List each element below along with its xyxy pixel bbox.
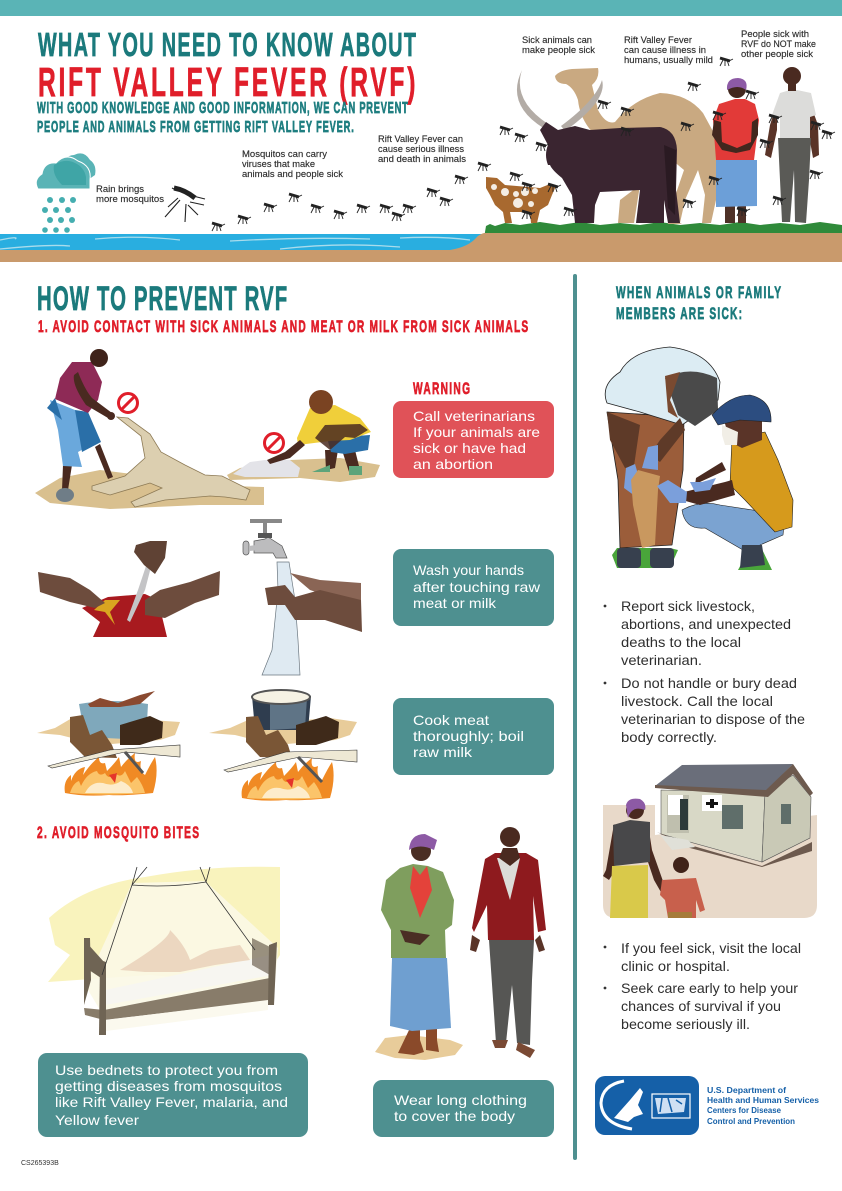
bullet list: seek care: become seriously ill. (621, 1016, 750, 1032)
subtitle (37, 98, 408, 136)
ground (0, 232, 842, 262)
grass (485, 222, 842, 233)
caption: sick animals: Sick animals can (522, 35, 592, 46)
caption: animals illness: cause serious illness (378, 144, 464, 155)
document code: CS265393B (21, 1160, 59, 1167)
water (0, 234, 490, 250)
vertical divider (573, 274, 577, 1160)
callout: cook meat: thoroughly; boil (413, 728, 524, 744)
right column heading (616, 282, 781, 323)
section 2 heading: 2. AVOID MOSQUITO BITES (37, 822, 199, 842)
clinic building (655, 764, 813, 867)
caption: mosquitos (242, 149, 343, 180)
callout: wash hands: meat or milk (413, 595, 497, 611)
bullet list: seek care: Seek care early to help your (621, 980, 798, 996)
title line 2: RIFT VALLEY FEVER (RVF) (38, 60, 415, 106)
callout: long clothing: to cover the body (394, 1108, 515, 1124)
callout: call veterinarians (393, 401, 554, 478)
illustration: visiting clinic (603, 764, 817, 918)
bullet list: report: abortions, and unexpected (621, 616, 791, 632)
agency name: U.S. Department of (707, 1085, 786, 1095)
logo: HHS CDC (595, 1076, 819, 1135)
illustration: washing hands at tap (243, 521, 362, 675)
caption: animals illness: Rift Valley Fever can (378, 134, 463, 145)
caption: human illness: humans, usually mild (624, 55, 713, 66)
illustration: woman in long clothing (375, 834, 463, 1060)
callout: bednets: getting diseases from mosquitos (55, 1078, 282, 1094)
illustration: man dragging dead calf (35, 349, 264, 509)
bullet list: report (604, 598, 805, 745)
callout: call veterinarians: sick or have had (413, 440, 526, 456)
callout: bednets (38, 1053, 308, 1137)
callout: bednets: Use bednets to protect you from (55, 1062, 278, 1078)
illustration: veterinarian examining calf (605, 347, 793, 570)
warning label: WARNING (413, 378, 470, 398)
title (37, 26, 416, 136)
icon: no sign 2 (264, 434, 284, 452)
callout: call veterinarians: an abortion (413, 456, 493, 472)
agency name: Health and Human Services (707, 1095, 819, 1105)
illustration: boy touching raw meat (227, 390, 380, 482)
callout: long clothing (373, 1080, 554, 1137)
icon: goat (486, 177, 556, 223)
subtitle: PEOPLE AND ANIMALS FROM GETTING RIFT VALLEY FEVER. (37, 117, 354, 136)
icon: no sign (118, 394, 138, 412)
illustration: butchering meat (38, 541, 220, 637)
caption: rain (96, 184, 164, 205)
caption: no person to person: People sick with (741, 29, 809, 40)
caption: sick animals: make people sick (522, 45, 595, 56)
caption: animals illness (378, 134, 466, 165)
illustration: man in long clothing (470, 827, 546, 1058)
caption: human illness: Rift Valley Fever (624, 35, 692, 46)
icon: rain cloud (36, 153, 95, 233)
caption: mosquitos: viruses that make (242, 159, 315, 170)
icon: sick woman (712, 78, 759, 223)
bullet list: report: veterinarian to dispose of the (621, 711, 805, 727)
bullet list: report: body correctly. (621, 729, 717, 745)
icon: HHS ring and eagle (601, 1081, 643, 1129)
callout: bednets: Yellow fever (55, 1112, 139, 1128)
panel: transmission scene (0, 29, 842, 262)
icon: large mosquito (165, 188, 205, 222)
illustration: cooking meat (37, 691, 180, 796)
callout: bednets: like Rift Valley Fever, malaria, and (55, 1094, 288, 1110)
caption: no person to person: other people sick (741, 49, 813, 60)
caption: no person to person: RVF do NOT make (741, 39, 816, 50)
section 1 heading: 1. AVOID CONTACT WITH SICK ANIMALS AND MEAT OR MILK FROM SICK ANIMALS (38, 316, 528, 336)
dead calf (92, 417, 250, 507)
caption: human illness (624, 35, 713, 66)
bullet list: seek care: chances of survival if you (621, 998, 781, 1014)
caption: human illness: can cause illness in (624, 45, 706, 56)
bullet list: report: veterinarian. (621, 652, 702, 668)
bullet list: report: livestock. Call the local (621, 693, 773, 709)
callout: wash hands (393, 549, 554, 626)
callout: wash hands: Wash your hands (413, 562, 524, 578)
callout: call veterinarians: Call veterinarians (413, 408, 535, 424)
subtitle: WITH GOOD KNOWLEDGE AND GOOD INFORMATION, WE CAN PREVENT (37, 98, 408, 117)
agency name: Control and Prevention (707, 1116, 795, 1126)
right column heading: MEMBERS ARE SICK: (616, 303, 742, 323)
illustration: bednet (48, 867, 280, 1035)
callout: call veterinarians: If your animals are (413, 424, 540, 440)
bullet list: report: Report sick livestock, (621, 598, 755, 614)
callout: cook meat: raw milk (413, 744, 473, 760)
agency name (707, 1085, 819, 1126)
caption: rain: Rain brings (96, 184, 144, 195)
caption: sick animals (522, 35, 595, 56)
bullet list: report: Do not handle or bury dead (621, 675, 797, 691)
callout: cook meat (393, 698, 554, 775)
bullet list: seek care: If you feel sick, visit the local (621, 940, 801, 956)
icon: sick man (765, 67, 819, 223)
caption: rain: more mosquitos (96, 194, 164, 205)
icon: ox (517, 70, 680, 223)
illustration: boiling milk (209, 690, 357, 801)
title line 1: WHAT YOU NEED TO KNOW ABOUT (38, 26, 416, 63)
bullet list: seek care: clinic or hospital. (621, 958, 730, 974)
callout: cook meat: Cook meat (413, 712, 489, 728)
callout: long clothing: Wear long clothing (394, 1092, 527, 1108)
woman and child (603, 799, 705, 918)
caption: mosquitos: Mosquitos can carry (242, 149, 327, 160)
caption: no person to person (741, 29, 816, 60)
icon: camel (555, 68, 718, 224)
icon: CDC mark (652, 1094, 690, 1118)
top band (0, 0, 842, 16)
caption: mosquitos: animals and people sick (242, 169, 343, 180)
agency name: Centers for Disease (707, 1105, 781, 1115)
bullet list: report: deaths to the local (621, 634, 741, 650)
caption: animals illness: and death in animals (378, 154, 466, 165)
bullet list: seek care (604, 940, 801, 1032)
mosquito swarm (212, 58, 835, 231)
main heading: HOW TO PREVENT RVF (37, 280, 287, 317)
callout: wash hands: after touching raw (413, 579, 541, 595)
right column heading: WHEN ANIMALS OR FAMILY (616, 282, 781, 302)
